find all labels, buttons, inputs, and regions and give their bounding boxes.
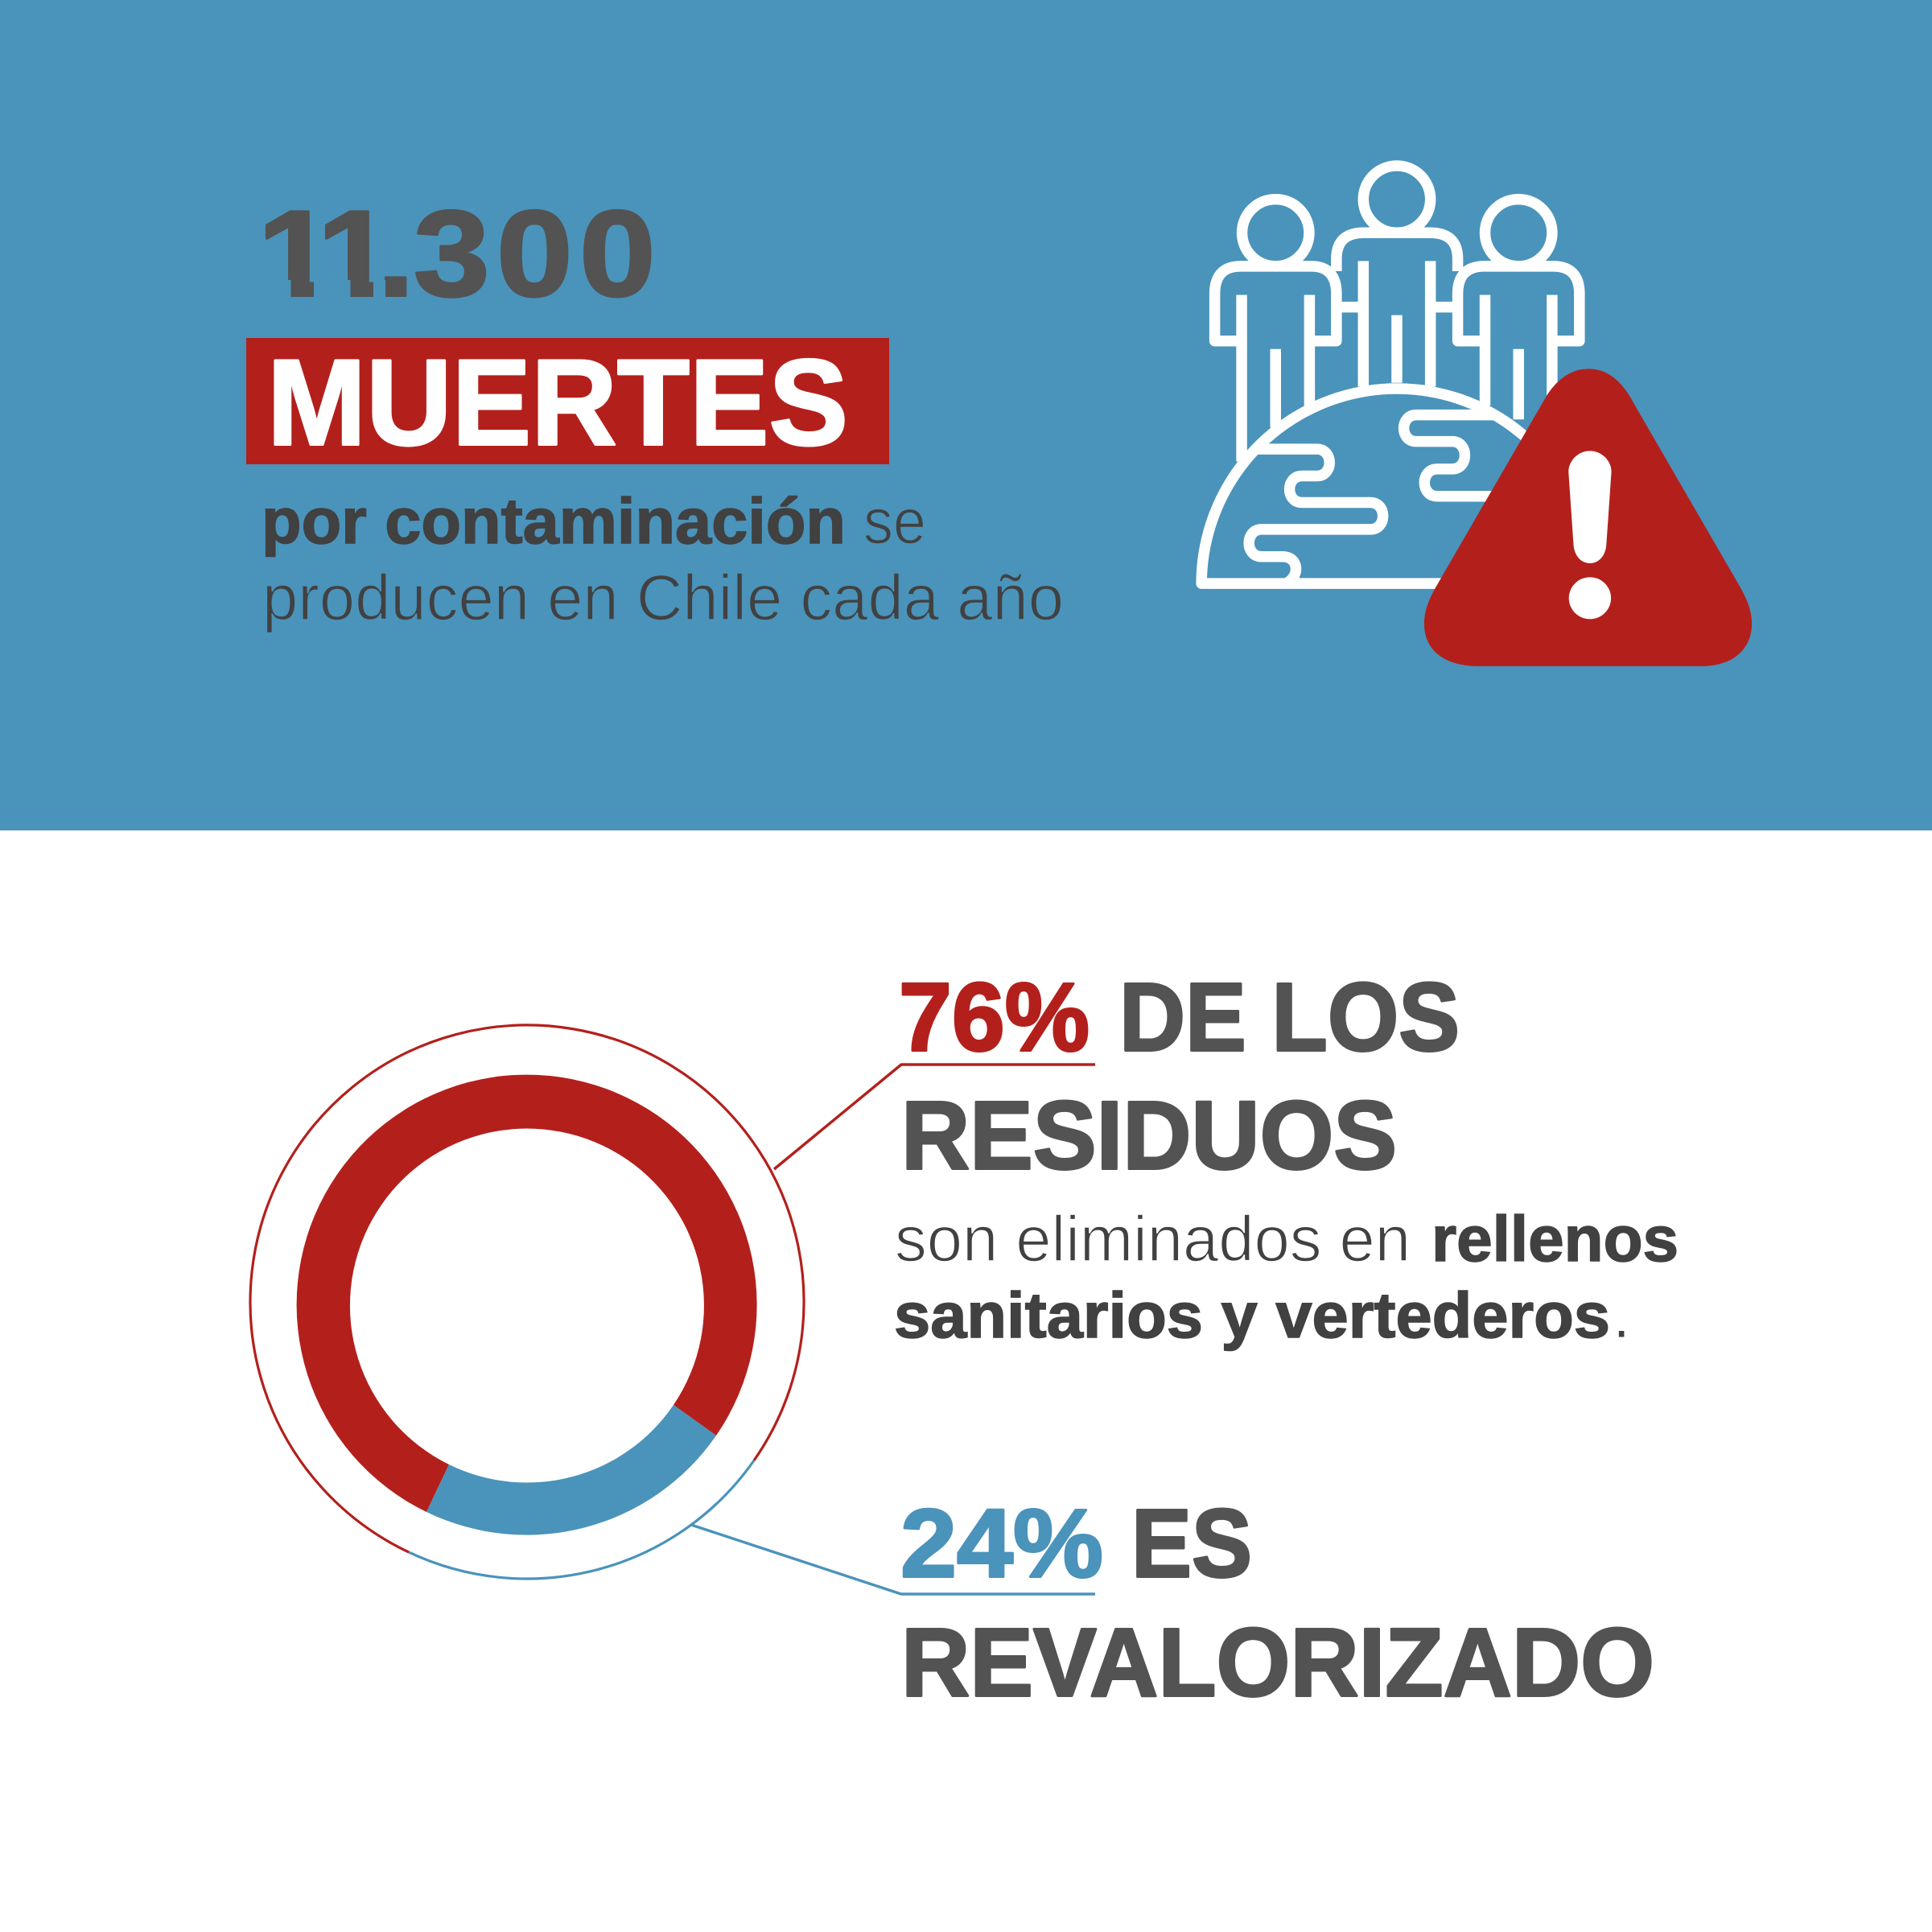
connector: 24% callout line <box>691 1525 1095 1594</box>
chart: donut 76% / 24% <box>297 1075 757 1535</box>
heading: 76% de los residuos: RESIDUOS <box>901 1080 1397 1189</box>
text block: son eliminados en rellenos sanitarios y vertederos <box>894 1203 1679 1351</box>
heading: 76% de los residuos: 76% <box>899 962 1090 1072</box>
donut segment: 76% <box>297 1075 757 1512</box>
icon: middle person <box>1337 166 1458 387</box>
heading: 11.300: 11.300 <box>257 186 656 322</box>
heading: 24% es revalorizado: 24% <box>900 1489 1103 1598</box>
text block: por contaminación se producen en Chile cada año <box>262 485 1064 633</box>
heading: 76% de los residuos <box>899 962 1460 1189</box>
icon: globe <box>1201 389 1557 583</box>
text block: son eliminados en rellenos sanitarios y vertederos: rellenos <box>1431 1203 1679 1275</box>
text block: por contaminación se producen en Chile cada año: se <box>863 485 926 557</box>
icon: left person <box>1215 200 1337 461</box>
donut segment: 24% <box>426 1405 716 1535</box>
text block: por contaminación se producen en Chile cada año: por contaminación <box>262 485 846 557</box>
icon: right person <box>1458 200 1580 419</box>
icon: people standing on a globe with warning triangle <box>1201 166 1752 666</box>
heading: 76% de los residuos: DE LOS <box>1119 962 1460 1072</box>
text block: son eliminados en rellenos sanitarios y vertederos: sanitarios y vertederos <box>894 1279 1610 1351</box>
text block: son eliminados en rellenos sanitarios y vertederos: son eliminados en <box>895 1203 1411 1275</box>
panel: blue header band <box>0 0 1932 830</box>
chart: outer ring <box>250 1025 804 1579</box>
text block: por contaminación se producen en Chile cada año: producen en Chile cada año <box>262 562 1064 633</box>
banner: MUERTES: MUERTES <box>267 335 848 472</box>
connector: 76% callout line <box>774 1065 1095 1169</box>
heading: 24% es revalorizado: ES <box>1131 1489 1252 1598</box>
heading: 24% es revalorizado: REVALORIZADO <box>901 1608 1654 1717</box>
icon: warning triangle <box>1424 369 1752 666</box>
heading: 24% es revalorizado <box>900 1489 1654 1717</box>
text block: son eliminados en rellenos sanitarios y vertederos: . <box>1613 1279 1630 1351</box>
